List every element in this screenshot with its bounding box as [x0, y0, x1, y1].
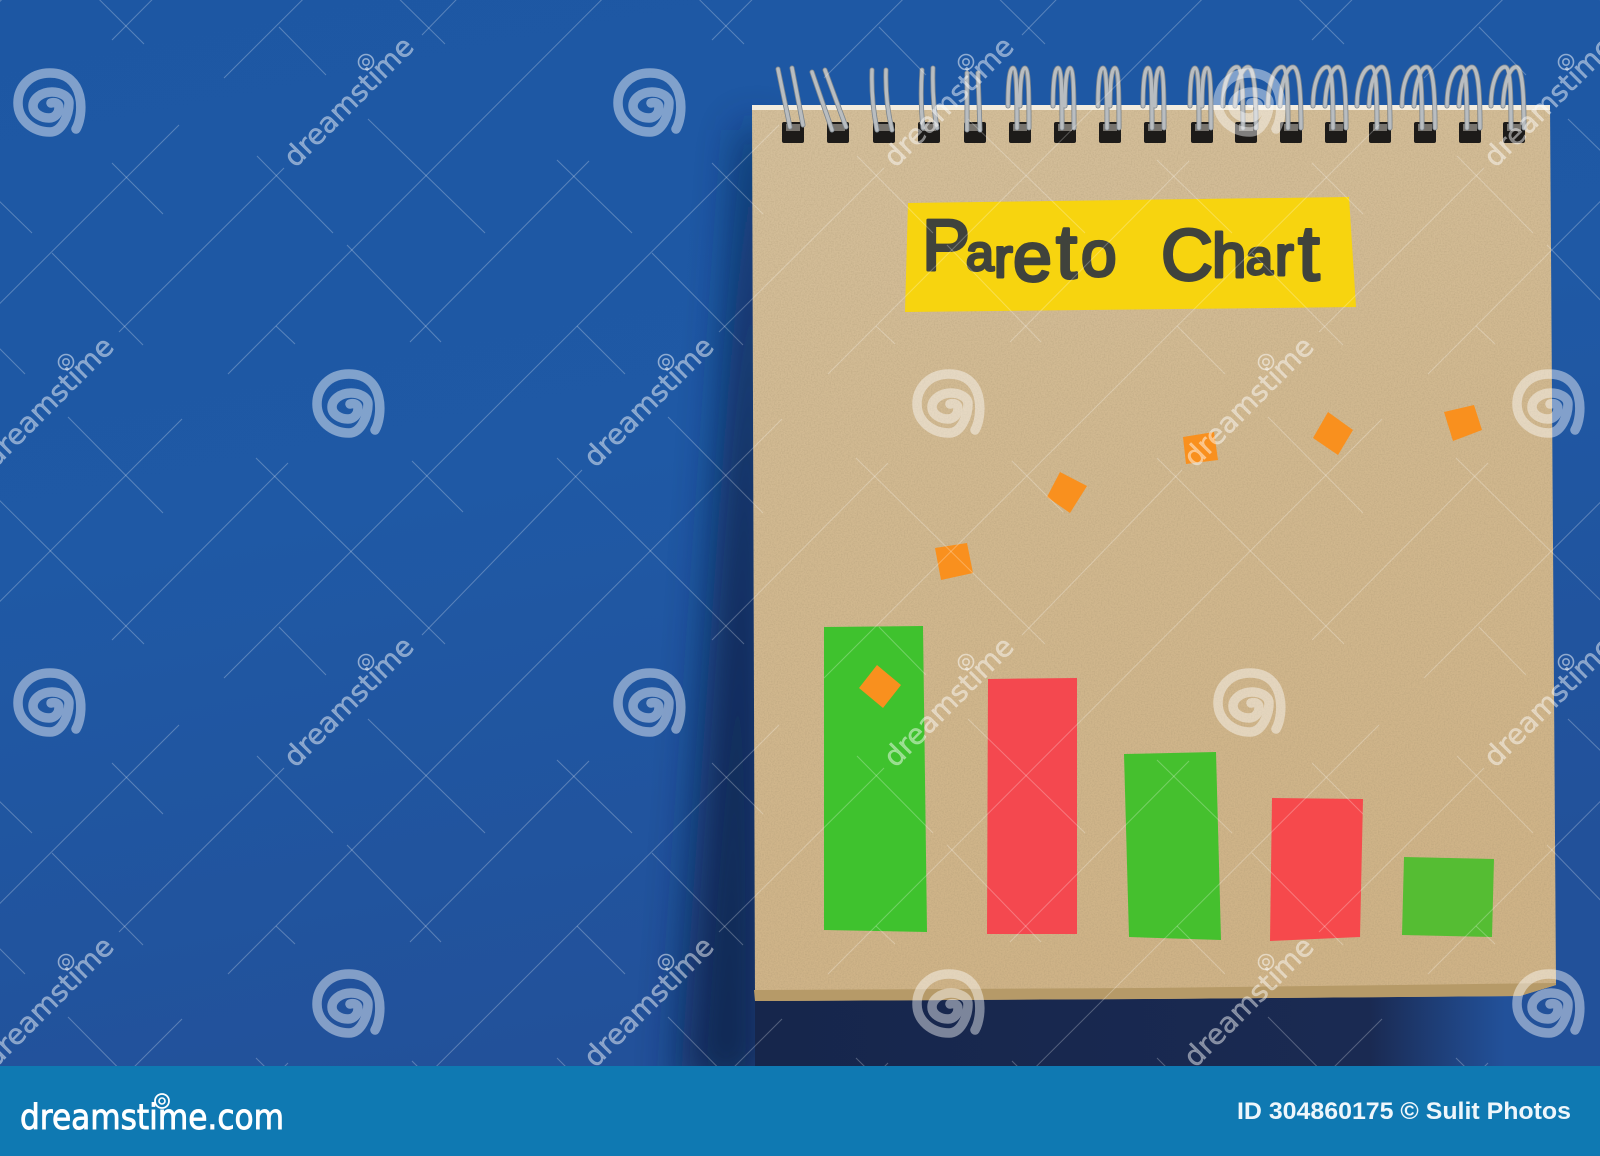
- marker 5: [1313, 412, 1353, 455]
- title: yellow note: r: [994, 226, 1013, 289]
- watermark text: dreamstime: [277, 30, 420, 173]
- shadow: left of notebook: [680, 130, 770, 1090]
- marker 1: [859, 665, 901, 708]
- title: yellow note: t: [1298, 209, 1320, 297]
- shadow: below notebook: [755, 990, 1505, 1066]
- title: yellow note: P: [922, 206, 970, 286]
- bar 2: red: [987, 678, 1077, 934]
- marker 4: [1183, 432, 1218, 464]
- marker 2: [935, 543, 973, 580]
- cumulative line markers: [859, 405, 1482, 708]
- title: yellow note: t: [1056, 210, 1077, 295]
- footer credit: ID 304860175 © Sulit Photos: [1237, 1098, 1571, 1125]
- title: yellow note: r: [1275, 224, 1294, 287]
- footer bar: [0, 1066, 1600, 1156]
- title: yellow note: [905, 197, 1356, 312]
- watermark text: dreamstime: [577, 330, 720, 473]
- watermark text: dreamstime: [877, 630, 1020, 773]
- title: yellow note: h: [1212, 222, 1246, 291]
- bar 3: green: [1124, 752, 1221, 940]
- watermark text: dreamstime: [277, 630, 420, 773]
- watermark text: dreamstime: [577, 930, 720, 1073]
- spiral binding: [778, 67, 1525, 143]
- marker 6: [1444, 405, 1482, 441]
- watermark registered marks: [58, 54, 1574, 970]
- title: yellow note: C: [1161, 216, 1213, 296]
- title: yellow note: o: [1081, 218, 1117, 290]
- watermark text: dreamstime: [877, 30, 1020, 173]
- title: yellow note: a: [1246, 232, 1273, 285]
- footer logo: dreamstime.com: [20, 1098, 284, 1138]
- watermark text: dreamstime: [1177, 930, 1320, 1073]
- bar 1: green: [824, 626, 927, 932]
- title: yellow note: e: [1013, 218, 1052, 296]
- title: yellow note: a: [966, 225, 994, 281]
- marker 3: [1047, 472, 1087, 513]
- watermark text: dreamstime: [1177, 330, 1320, 473]
- panel: kraft notebook: [752, 105, 1556, 1002]
- bar 5: green: [1402, 857, 1494, 937]
- bar chart: [824, 626, 1494, 941]
- bar 4: red: [1270, 798, 1363, 941]
